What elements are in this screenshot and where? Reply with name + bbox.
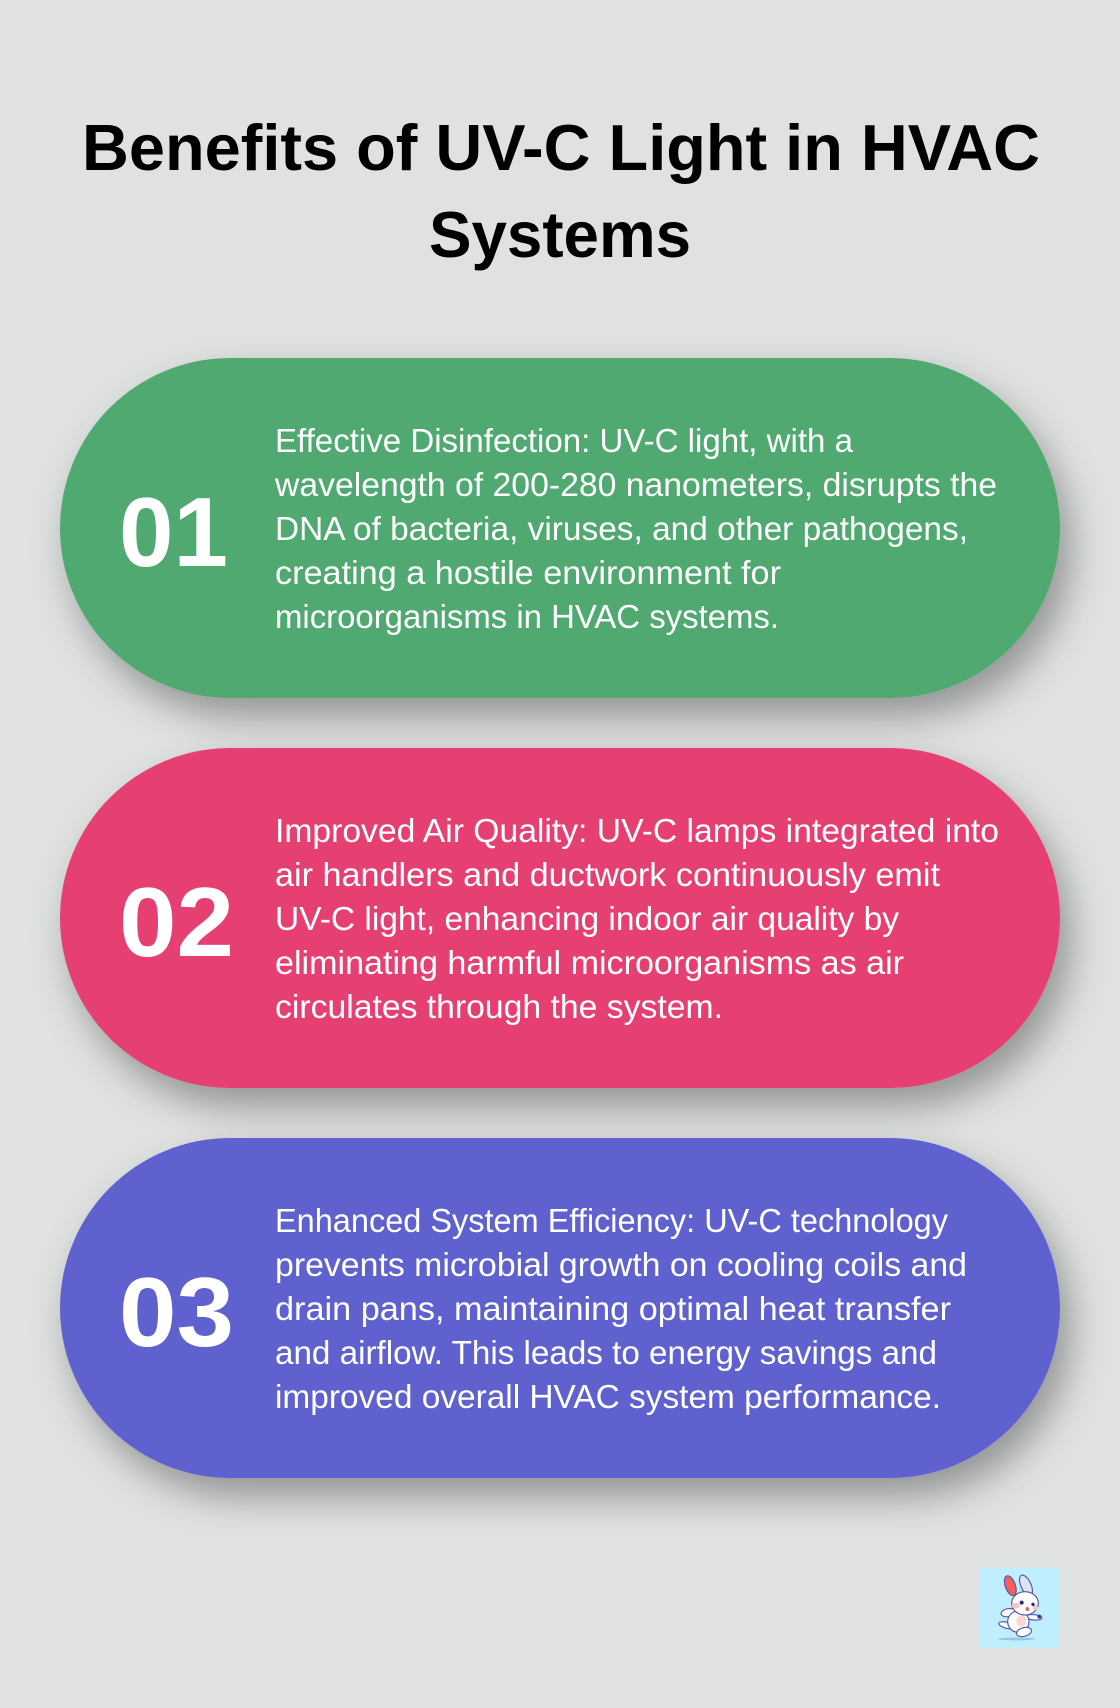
description 02 [275,812,999,1025]
title [82,111,1040,271]
description 01 [274,422,997,635]
panel: step 02 improved air quality [60,748,1060,1088]
description 02: UV-C light, enhancing indoor air quality by [275,900,900,937]
title: Benefits of UV-C Light in HVAC [82,111,1040,184]
number 01: 01 [119,477,228,587]
description 03: prevents microbial growth on cooling coils and [275,1246,967,1283]
description 02: eliminating harmful microorganisms as air [275,944,904,981]
description 03 [275,1202,967,1415]
green pill [60,358,1060,698]
blue pill [60,1138,1060,1478]
number 02: 02 [119,867,234,977]
description 03: Enhanced System Efficiency: UV-C technology [275,1202,948,1239]
panel: step 01 effective disinfection [60,358,1060,698]
number 03: 03 [119,1257,234,1367]
description 01: Effective Disinfection: UV-C light, with a [275,422,854,459]
description 03: drain pans, maintaining optimal heat transfer [275,1290,951,1327]
description 02: circulates through the system. [275,988,723,1025]
description 01: creating a hostile environment for [275,554,781,591]
panel: step 03 enhanced system efficiency [60,1138,1060,1478]
description 03: and airflow. This leads to energy savings and [275,1334,937,1371]
description 02: Improved Air Quality: UV-C lamps integrated into [275,812,999,849]
description 01: microorganisms in HVAC systems. [275,598,779,635]
description 03: improved overall HVAC system performance. [275,1378,941,1415]
title: Systems [429,198,691,271]
icon: running rabbit logo [979,1568,1060,1648]
description 02: air handlers and ductwork continuously emit [275,856,940,893]
pink pill [60,748,1060,1088]
description 01: DNA of bacteria, viruses, and other pathogens, [275,510,968,547]
description 01: wavelength of 200-280 nanometers, disrupts the [274,466,997,503]
